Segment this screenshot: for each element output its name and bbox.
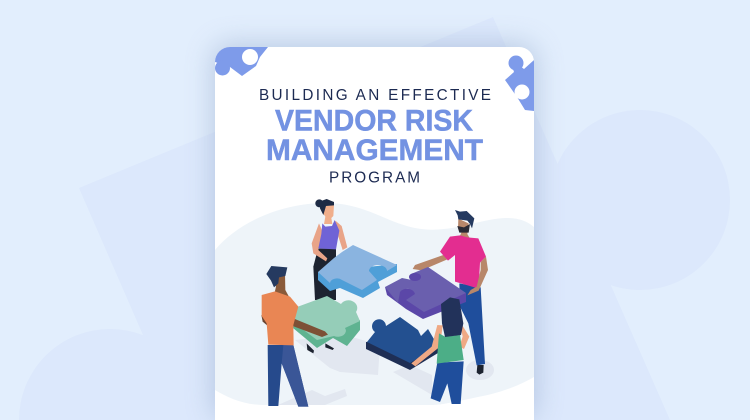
top [437, 333, 464, 364]
arms [411, 321, 469, 366]
hair [441, 297, 463, 337]
heading: management: MANAGEMENT [266, 134, 483, 167]
hair [455, 210, 474, 228]
hair [315, 199, 323, 207]
card shadow [213, 44, 536, 420]
puzzle piece: light blue [318, 245, 397, 298]
heading: building an effective: BUILDING AN EFFECTIVE [259, 87, 491, 104]
puzzle piece: green [293, 296, 360, 348]
ground shadows [278, 335, 494, 405]
neck and head [324, 206, 334, 224]
puzzle piece: purple [385, 267, 466, 319]
icon: top left puzzle corner [215, 47, 268, 76]
far arm [261, 315, 267, 326]
pants [431, 361, 464, 404]
right arm [467, 257, 488, 295]
person: woman in green top [411, 297, 469, 404]
pants [268, 345, 308, 407]
beard [457, 224, 470, 233]
person: woman with purple top [307, 199, 347, 353]
person: man in orange shirt [261, 266, 328, 407]
pants [459, 283, 485, 365]
card [215, 47, 534, 420]
person: man in pink shirt [413, 210, 488, 375]
heading: program: PROGRAM [329, 170, 420, 187]
neck and head [274, 276, 289, 296]
heading: vendor risk: VENDOR RISK [275, 105, 473, 138]
near arm [292, 318, 328, 337]
shoe [477, 365, 484, 375]
background blob [215, 203, 534, 405]
legs [313, 249, 336, 300]
hair [266, 266, 287, 287]
arms [312, 221, 347, 261]
shirt [262, 291, 298, 345]
top [318, 220, 339, 249]
icon: top right puzzle corner [505, 56, 534, 111]
shirt [440, 235, 486, 289]
puzzle piece: navy [366, 317, 438, 370]
outstretched arm [413, 255, 447, 270]
shoes [307, 343, 334, 353]
neck and head [458, 219, 470, 239]
